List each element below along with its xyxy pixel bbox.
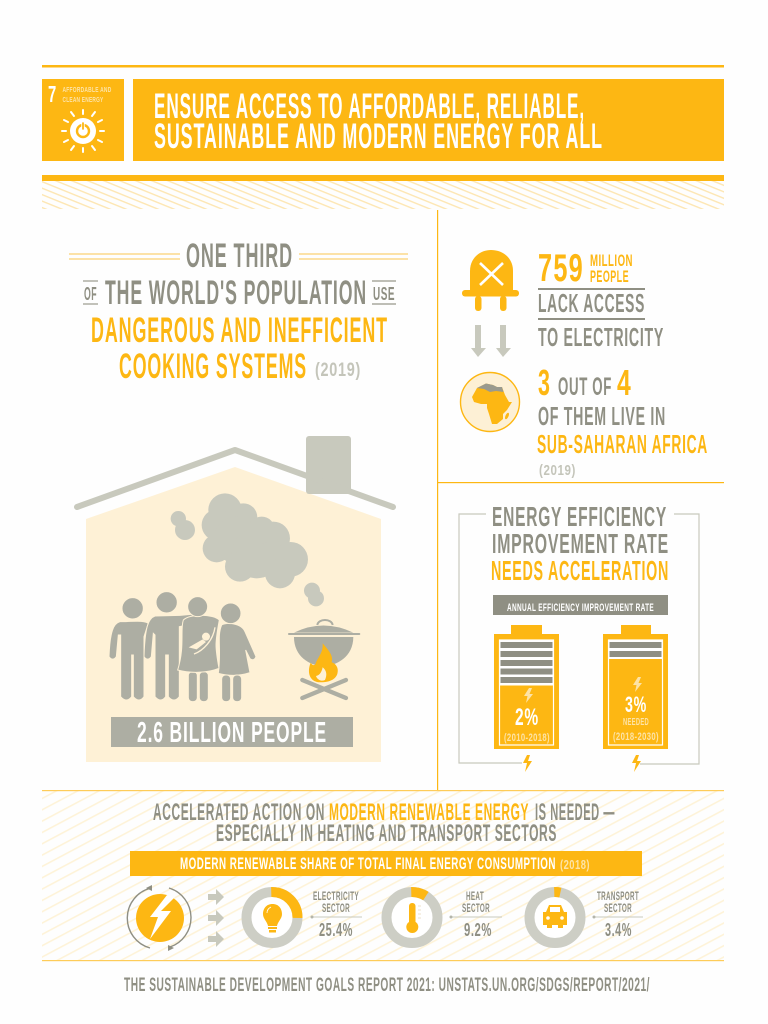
illustration: house with family and cooking fire (77, 436, 393, 762)
chimney (306, 436, 351, 494)
panel: renewable energy (42, 790, 724, 961)
panel: title banner (133, 79, 724, 161)
icon: thermometer (406, 903, 421, 933)
label: electricity sector 25.4%: 25.4% (319, 920, 353, 940)
stat: 759 million: 759 (538, 247, 584, 290)
chart: transport sector (530, 892, 580, 943)
panel: lack of electricity (460, 247, 708, 479)
subheading bar: (2018) (560, 857, 590, 872)
battery: 3 percent: 3% (625, 692, 647, 717)
battery: 2 percent (494, 625, 559, 749)
heading: one third of the world's population (69, 237, 408, 386)
stat: 3 out of 4: 4 (617, 362, 632, 403)
icon: sun with power symbol (62, 110, 104, 152)
label: transport sector 3.4%: TRANSPORT (597, 889, 639, 903)
heading (153, 799, 615, 847)
subheading bar (130, 851, 642, 876)
stat: 759 million: MILLION (590, 251, 633, 270)
label: transport sector 3.4%: SECTOR (604, 901, 632, 915)
text: lack access to electricity: LACK ACCESS (538, 288, 645, 318)
subheading bar (493, 595, 668, 615)
chart: heat sector (386, 892, 438, 943)
text: of them live in sub-Saharan Africa: OF THEM LIVE IN (538, 401, 666, 431)
battery: 2 percent: (2010-2018) (504, 732, 550, 744)
heading: one third of the world's population: THE WORLD'S POPULATION (105, 274, 367, 312)
stat: 3 out of 4: OUT OF (558, 373, 612, 401)
battery: 3 percent (603, 625, 668, 749)
text: of them live in sub-Saharan Africa: (2019) (539, 462, 576, 479)
goal name: CLEAN ENERGY (62, 95, 104, 104)
cooking pot over fire (289, 620, 359, 698)
text: lack access to electricity (538, 288, 664, 352)
text: lack access to electricity: TO ELECTRICITY (538, 322, 664, 352)
heading: one third of the world's population: ONE THIRD (186, 237, 293, 275)
goal name: AFFORDABLE AND (62, 85, 112, 94)
label: electricity sector 25.4%: ELECTRICITY (313, 889, 359, 903)
goal number: 7 (48, 81, 57, 107)
heading: one third of the world's population: OF (84, 284, 97, 304)
goal name (62, 85, 112, 104)
label: heat sector 9.2%: SECTOR (462, 901, 490, 915)
battery: 3 percent: NEEDED (623, 717, 649, 728)
label: heat sector 9.2%: 9.2% (464, 920, 492, 940)
icon: energy cycle bolt (127, 885, 191, 951)
family of people (109, 592, 256, 702)
house body (86, 467, 381, 762)
heading: ACCELERATED ACTION ON (153, 799, 325, 826)
text: of them live in sub-Saharan Africa (537, 401, 708, 479)
label: 2.6 billion people: 2.6 BILLION PEOPLE (137, 717, 327, 749)
label: 2.6 billion people (111, 717, 353, 749)
label: electricity sector 25.4% (310, 889, 362, 940)
heading: MODERN RENEWABLE ENERGY (329, 799, 529, 826)
chart: electricity sector (246, 892, 298, 943)
panel: SDG 7 badge (42, 79, 124, 161)
arrows: down (471, 325, 511, 357)
label: transport sector 3.4%: 3.4% (605, 920, 632, 940)
icon: bolts (523, 755, 641, 772)
heading: one third of the world's population: COOKING SYSTEMS (119, 347, 307, 386)
label: heat sector 9.2% (450, 889, 502, 940)
panel: renewable energy: IS NEEDED — (535, 799, 615, 826)
icon: car (543, 905, 567, 928)
icon: Africa map (460, 372, 520, 432)
stat: 3 out of 4 (538, 362, 632, 403)
heading: one third of the world's population: (2019) (315, 360, 361, 381)
battery: 2 percent: 2% (515, 704, 539, 731)
title (154, 87, 603, 156)
heading (491, 501, 669, 586)
heading: one third of the world's population: DANGEROUS AND INEFFICIENT (91, 311, 388, 350)
subheading bar: ANNUAL EFFICIENCY IMPROVEMENT RATE (507, 602, 654, 614)
arrows: to sectors (208, 889, 224, 947)
panel: energy efficiency (459, 501, 699, 772)
icon: light bulb (263, 904, 282, 932)
smoke cloud (171, 493, 324, 606)
label: transport sector 3.4% (592, 889, 643, 940)
stat: 759 million: PEOPLE (590, 267, 629, 286)
label: electricity sector 25.4%: SECTOR (322, 901, 350, 915)
battery: 3 percent: (2018-2030) (613, 731, 659, 743)
stat: 3 out of 4: 3 (538, 362, 551, 403)
roof (77, 450, 393, 507)
heading: one third of the world's population: USE (373, 284, 395, 304)
label: heat sector 9.2%: HEAT (466, 889, 484, 903)
icon: plug with cross (462, 250, 519, 311)
